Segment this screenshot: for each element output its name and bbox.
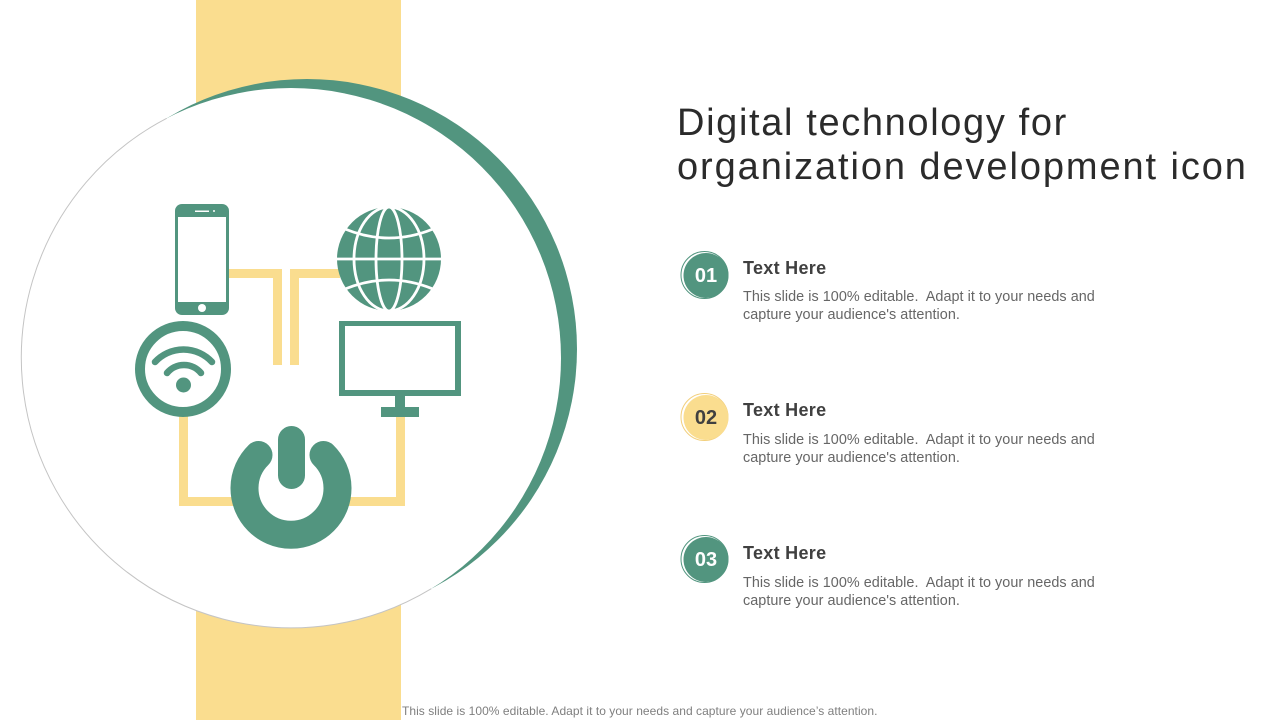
footer note: This slide is 100% editable. Adapt it to your needs and capture your audience’s attention.	[402, 704, 877, 718]
icon: globe	[337, 207, 441, 311]
yellow vertical band	[196, 0, 401, 720]
icon: smartphone	[175, 204, 229, 315]
title: Digital technology for	[677, 102, 1068, 144]
icon: monitor	[339, 321, 461, 417]
item 2 heading: Text Here	[743, 400, 826, 420]
item 1 text: This slide is 100% editable. Adapt it to your needs and capture your audience's attention.	[743, 289, 1095, 323]
green crescent circle	[37, 79, 577, 619]
grey circle outline	[21, 118, 431, 628]
white main circle	[21, 88, 561, 628]
item 3 text: This slide is 100% editable. Adapt it to your needs and capture your audience's attention.	[743, 575, 1095, 609]
title	[677, 102, 1248, 188]
item 2 text: This slide is 100% editable. Adapt it to your needs and capture your audience's attention.	[743, 432, 1095, 466]
item 1 heading: Text Here	[743, 258, 826, 278]
connector lines	[184, 274, 400, 502]
icon: power button	[244, 426, 337, 535]
title: organization development icon	[677, 146, 1248, 188]
icon: wifi	[140, 326, 226, 412]
item 3 heading: Text Here	[743, 543, 826, 563]
badge: 02: 02	[695, 407, 717, 429]
badge: 03: 03	[695, 549, 717, 571]
badge: 01: 01	[695, 265, 717, 287]
